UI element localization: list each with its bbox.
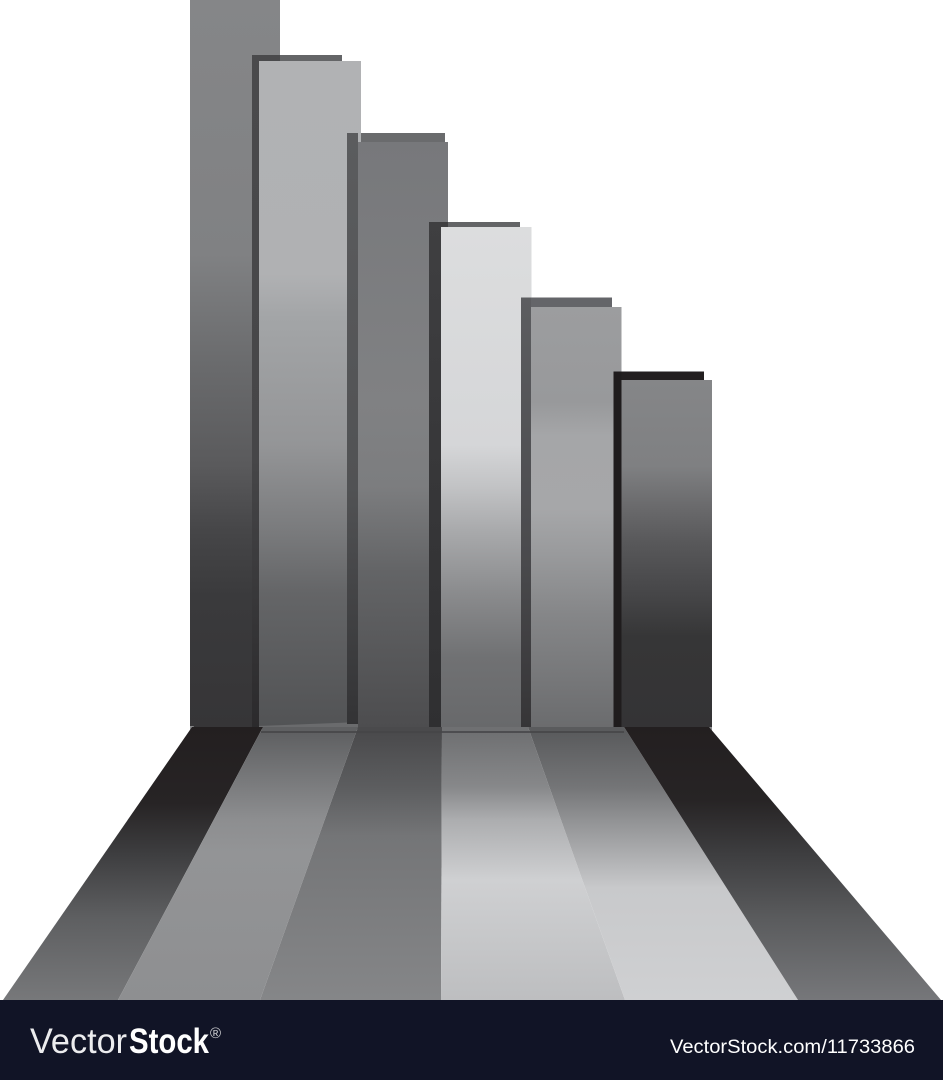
floor seam line: [261, 731, 624, 733]
floor strip 6: [624, 727, 941, 1000]
bar 5: [521, 298, 622, 727]
bar 4: [429, 222, 532, 727]
floor strip 3: [260, 727, 442, 1000]
bar 2: [252, 55, 361, 727]
floor strip 4: [441, 727, 625, 1000]
floor wedge under bar 2: [259, 720, 359, 729]
bar 6: [614, 372, 712, 727]
back bar: [190, 0, 280, 727]
floor strip 5: [528, 727, 798, 1000]
floor edge right: [707, 727, 712, 733]
floor: [3, 726, 941, 1000]
floor edge left: [190, 726, 194, 733]
floor strip 1: [3, 727, 263, 1000]
registered mark: ®: [210, 1025, 221, 1042]
bar 3: [347, 133, 448, 727]
logo word Stock: Stock: [129, 1022, 209, 1061]
watermark footer bar: [0, 1000, 943, 1080]
floor strip 2: [118, 727, 358, 1000]
image id: VectorStock.com/11733866: [670, 1037, 915, 1058]
logo word Vector: Vector: [30, 1022, 127, 1061]
